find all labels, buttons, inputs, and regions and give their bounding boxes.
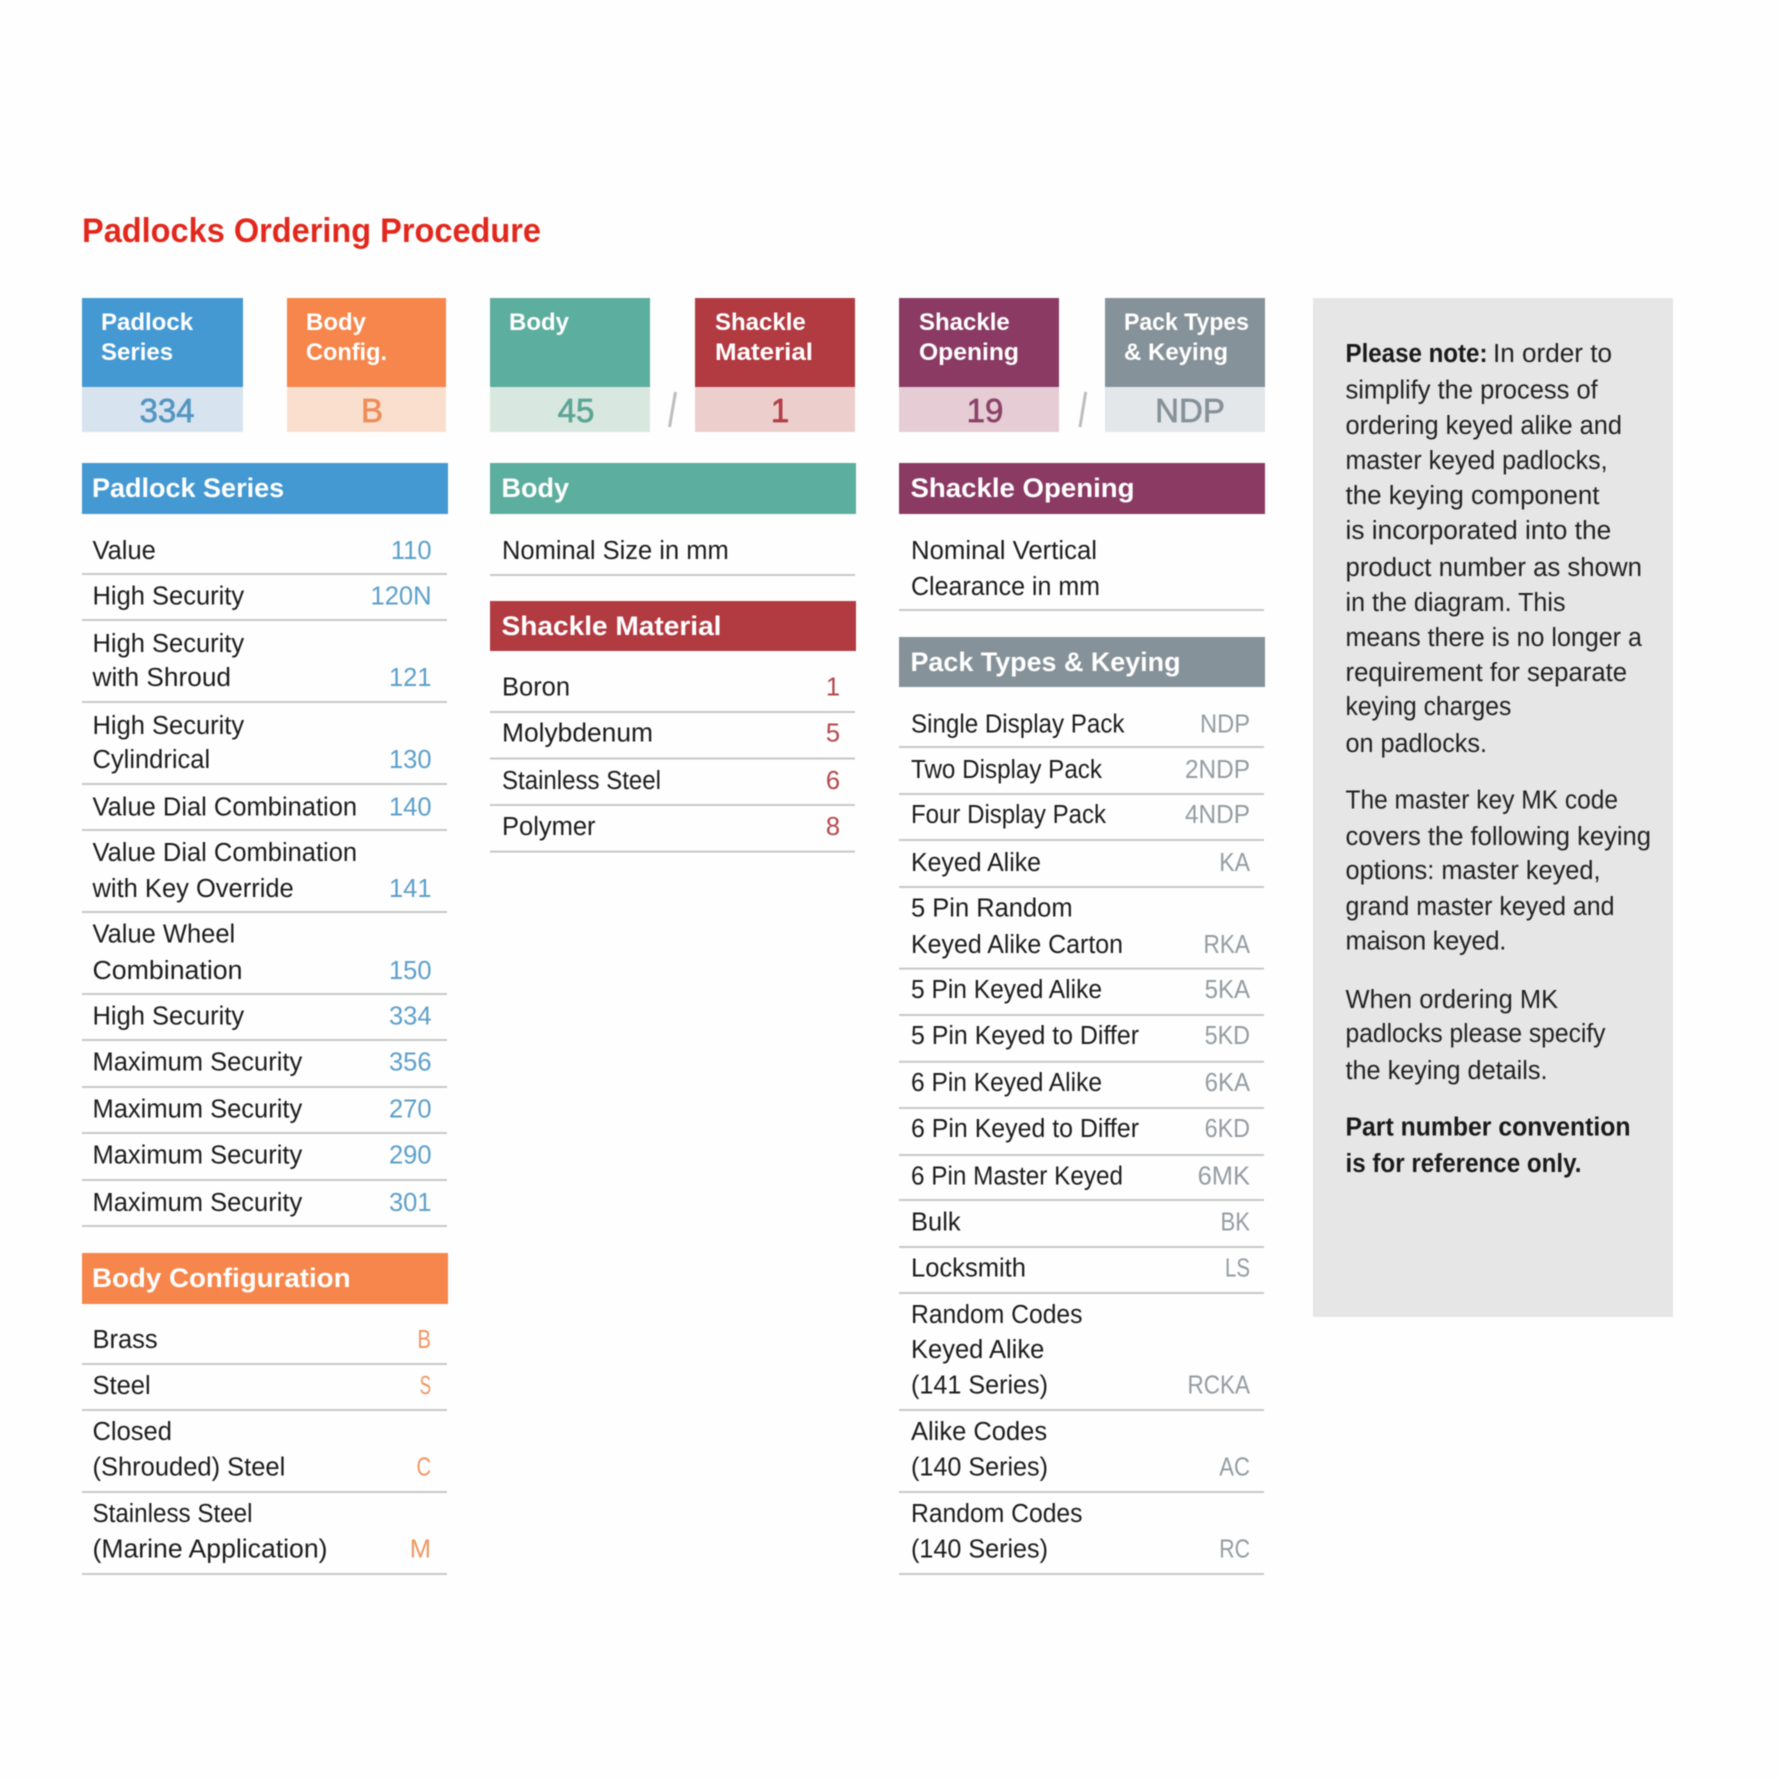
- heading: Pack Types & Keying: Pack Types & Keying: [910, 647, 1180, 677]
- text block: please note: in the diagram. This: [1346, 589, 1566, 617]
- heading: Padlock Series: [82, 463, 448, 514]
- row: Alike Codes (140 Series): Alike Codes: [911, 1418, 1047, 1446]
- part number key: Body Config: B: [361, 392, 383, 429]
- row: Value Dial Combination with Key Override: [82, 839, 447, 912]
- row: Maximum Security 270: 270: [389, 1096, 432, 1124]
- row: Random Codes Keyed Alike (141 Series): RCKA: [1188, 1372, 1250, 1400]
- row: Stainless Steel (Marine Application): M: [410, 1536, 431, 1564]
- row: Value Dial Combination: [82, 794, 447, 830]
- heading: Pack Types & Keying: [899, 637, 1265, 687]
- text block: master key: The master key MK code: [1346, 786, 1618, 814]
- heading: Shackle Material: [490, 601, 856, 651]
- text block: please note: product number as shown: [1346, 554, 1642, 582]
- row: Molybdenum: [490, 720, 855, 758]
- part number key: Body: 45: [558, 392, 594, 429]
- row: Two Display Pack: [899, 756, 1264, 794]
- row: Brass: [82, 1326, 447, 1364]
- row: Maximum Security 290: 290: [389, 1142, 432, 1170]
- row: Nominal Vertical Clearance in mm: Nominal Vertical: [911, 537, 1097, 565]
- row: Keyed Alike: [899, 849, 1264, 887]
- row: Molybdenum: 5: [826, 720, 840, 748]
- part number key: Shackle Opening: Opening: [919, 339, 1019, 366]
- row: High Security 334: High Security: [92, 1002, 244, 1030]
- row: 5 Pin Random Keyed Alike Carton: Keyed Alike Carton: [911, 931, 1123, 959]
- row: 6 Pin Master Keyed: [899, 1162, 1264, 1200]
- row: Boron: Boron: [502, 674, 570, 702]
- row: Two Display Pack: Two Display Pack: [911, 756, 1102, 784]
- row: Nominal Vertical Clearance in mm: [899, 537, 1264, 610]
- part number key: Shackle Material: Shackle: [715, 309, 806, 336]
- row: Locksmith: [899, 1254, 1264, 1293]
- heading: Padlock Series: Padlock Series: [92, 473, 284, 503]
- row: Closed (Shrouded) Steel: (Shrouded) Steel: [92, 1454, 285, 1482]
- text block: please note: In order to: [1493, 340, 1612, 368]
- text block: please note: keying charges: [1346, 693, 1511, 721]
- panel: Body: [490, 463, 856, 575]
- text block: part number convention: Part number convention: [1346, 1114, 1630, 1142]
- row: 5 Pin Keyed to Differ: [899, 1022, 1264, 1062]
- row: Alike Codes (140 Series): [899, 1418, 1264, 1492]
- row: Steel: [82, 1372, 447, 1410]
- heading: Body: Body: [502, 473, 569, 503]
- panel: Shackle Material: [490, 601, 856, 852]
- panel: Shackle Opening: [899, 463, 1265, 610]
- row: Maximum Security 356: [82, 1048, 447, 1087]
- row: 6 Pin Keyed to Differ: 6 Pin Keyed to Differ: [911, 1115, 1139, 1143]
- row: Random Codes (140 Series): [899, 1500, 1264, 1574]
- row: 5 Pin Random Keyed Alike Carton: [899, 894, 1264, 969]
- heading: Body Configuration: Body Configuration: [92, 1263, 350, 1293]
- row: 6 Pin Keyed Alike: 6 Pin Keyed Alike: [911, 1069, 1102, 1097]
- text block: please note: ordering keyed alike and: [1346, 412, 1622, 440]
- part number key: Body: [490, 298, 650, 432]
- text block: please note: master keyed padlocks,: [1346, 447, 1608, 475]
- row: Locksmith: Locksmith: [911, 1254, 1026, 1282]
- panel: Body Configuration: [82, 1253, 448, 1574]
- row: Value Wheel Combination: Value Wheel: [92, 920, 235, 948]
- row: Stainless Steel: 6: [826, 767, 840, 795]
- row: Single Display Pack: Single Display Pack: [911, 710, 1125, 738]
- slash separator: [670, 392, 676, 427]
- heading: Shackle Opening: Shackle Opening: [910, 473, 1134, 503]
- text block: ordering MK: [1346, 986, 1606, 1085]
- row: Stainless Steel (Marine Application): Stainless Steel: [92, 1500, 252, 1528]
- heading: Body: [490, 463, 856, 514]
- text block: please note: [1346, 340, 1643, 758]
- row: Random Codes Keyed Alike (141 Series): Random Codes: [911, 1301, 1082, 1329]
- row: Two Display Pack: 2NDP: [1185, 756, 1250, 784]
- row: High Security with Shroud: High Security: [92, 630, 244, 658]
- row: Nominal Size in mm: Nominal Size in mm: [502, 537, 729, 565]
- text block: ordering MK: When ordering MK: [1346, 986, 1558, 1014]
- text block: please note: the keying component: [1346, 482, 1600, 510]
- row: Random Codes Keyed Alike (141 Series): Keyed Alike: [911, 1336, 1044, 1364]
- row: Locksmith: LS: [1225, 1254, 1250, 1282]
- row: Alike Codes (140 Series): AC: [1219, 1454, 1250, 1482]
- row: Random Codes (140 Series): (140 Series): [911, 1536, 1048, 1564]
- row: High Security with Shroud: [82, 630, 447, 702]
- row: Maximum Security 270: [82, 1096, 447, 1133]
- text block: please note: simplify the process of: [1346, 377, 1599, 405]
- row: Polymer: [490, 813, 855, 852]
- row: Brass: B: [417, 1326, 431, 1354]
- panel: Padlock Series: [82, 463, 448, 1226]
- part number key: Shackle Material: [695, 298, 855, 432]
- text block: ordering MK: the keying details.: [1346, 1057, 1548, 1085]
- title: Padlocks Ordering Procedure: [82, 212, 541, 250]
- row: Boron: [490, 674, 855, 712]
- slash separator: [1080, 392, 1086, 427]
- row: Molybdenum: Molybdenum: [502, 720, 653, 748]
- row: Polymer: 8: [826, 813, 840, 841]
- row: Value Dial Combination: Value Dial Combination: [92, 794, 357, 822]
- row: 5 Pin Keyed Alike: [899, 976, 1264, 1015]
- part number key: Pack Types & Keying: NDP: [1155, 392, 1225, 429]
- row: Boron: 1: [826, 674, 840, 702]
- row: Bulk: Bulk: [911, 1208, 961, 1236]
- part number key: Pack Types & Keying: [1105, 298, 1265, 432]
- part number key: Shackle Material: Material: [715, 339, 813, 366]
- row: Four Display Pack: [899, 801, 1264, 840]
- text block: master key: covers the following keying: [1346, 823, 1651, 851]
- row: Bulk: BK: [1220, 1208, 1250, 1236]
- row: Maximum Security 290: [82, 1142, 447, 1180]
- row: Maximum Security 301: 301: [389, 1189, 432, 1217]
- row: 6 Pin Master Keyed: 6 Pin Master Keyed: [911, 1162, 1123, 1190]
- row: Value Dial Combination with Key Override: Value Dial Combination: [92, 839, 357, 867]
- row: Closed (Shrouded) Steel: C: [416, 1454, 431, 1482]
- part number key: Body Config: Config.: [306, 339, 387, 366]
- row: Brass: Brass: [92, 1326, 158, 1354]
- text block: master key: options: master keyed,: [1346, 857, 1600, 885]
- text block: please note: means there is no longer a: [1346, 624, 1643, 652]
- row: High Security 120N: [82, 582, 447, 620]
- heading: Shackle Material: Shackle Material: [502, 611, 722, 641]
- row: Stainless Steel (Marine Application): (Marine Application): [92, 1536, 328, 1564]
- row: Bulk: [899, 1208, 1264, 1247]
- row: Value Dial Combination: 140: [389, 794, 432, 822]
- part number key: Pack Types & Keying: Pack Types: [1124, 309, 1249, 336]
- row: High Security with Shroud: 121: [389, 664, 432, 692]
- text block: master key: maison keyed.: [1346, 928, 1506, 956]
- row: High Security Cylindrical: 130: [389, 746, 432, 774]
- text block: part number convention: is for reference only.: [1346, 1150, 1582, 1178]
- row: Value: Value: [92, 537, 156, 565]
- text block: please note: on padlocks.: [1346, 730, 1487, 758]
- row: Value Dial Combination with Key Override: 141: [389, 875, 432, 903]
- row: 5 Pin Keyed Alike: 5KA: [1205, 976, 1250, 1004]
- part number key: Body Config: [287, 298, 446, 432]
- row: High Security Cylindrical: [82, 712, 447, 784]
- row: Polymer: Polymer: [502, 813, 596, 841]
- part number key: Padlock Series: [82, 298, 243, 432]
- row: High Security with Shroud: with Shroud: [91, 664, 231, 692]
- row: Random Codes (140 Series): Random Codes: [911, 1500, 1082, 1528]
- row: 5 Pin Keyed to Differ: 5KD: [1205, 1022, 1250, 1050]
- text block: please note: requirement for separate: [1346, 659, 1627, 687]
- text block: master key: [1346, 786, 1651, 956]
- text block: master key: grand master keyed and: [1346, 893, 1614, 921]
- row: 6 Pin Keyed Alike: [899, 1069, 1264, 1108]
- row: Value Wheel Combination: Combination: [92, 957, 242, 985]
- row: 5 Pin Keyed Alike: 5 Pin Keyed Alike: [911, 976, 1102, 1004]
- row: Steel: Steel: [92, 1372, 151, 1400]
- row: Stainless Steel: [490, 767, 855, 805]
- row: 6 Pin Master Keyed: 6MK: [1198, 1162, 1250, 1190]
- row: Steel: S: [420, 1372, 431, 1400]
- part number key: Shackle Material: 1: [771, 392, 789, 429]
- row: Stainless Steel: Stainless Steel: [502, 767, 661, 795]
- row: Single Display Pack: [899, 710, 1264, 747]
- row: High Security 120N: High Security: [92, 582, 244, 610]
- row: Stainless Steel (Marine Application): [82, 1500, 447, 1574]
- heading: Body Configuration: [82, 1253, 448, 1304]
- row: Random Codes Keyed Alike (141 Series): (141 Series): [911, 1372, 1048, 1400]
- row: High Security Cylindrical: High Security: [92, 712, 244, 740]
- row: Maximum Security 301: Maximum Security: [92, 1189, 302, 1217]
- row: Closed (Shrouded) Steel: Closed: [92, 1418, 172, 1446]
- text block: ordering MK: padlocks please specify: [1346, 1020, 1606, 1048]
- part number key: Shackle Opening: [899, 298, 1059, 432]
- row: High Security 334: [82, 1002, 447, 1040]
- row: Value Dial Combination with Key Override: with Key Override: [92, 875, 294, 903]
- row: Maximum Security 301: [82, 1189, 447, 1226]
- part number key: Shackle Opening: 19: [967, 392, 1003, 429]
- row: High Security 334: 334: [389, 1002, 432, 1030]
- row: Alike Codes (140 Series): (140 Series): [911, 1454, 1048, 1482]
- row: Maximum Security 290: Maximum Security: [92, 1142, 302, 1170]
- row: 6 Pin Keyed to Differ: 6KD: [1205, 1115, 1250, 1143]
- part number key: Shackle Opening: Shackle: [919, 309, 1010, 336]
- part number key: Padlock Series: Padlock: [101, 309, 194, 336]
- part number key: Padlock Series: Series: [101, 339, 173, 366]
- text block: part number convention: [1346, 1114, 1630, 1178]
- row: 5 Pin Random Keyed Alike Carton: 5 Pin Random: [911, 894, 1073, 922]
- row: Value Wheel Combination: 150: [389, 957, 432, 985]
- row: 6 Pin Keyed Alike: 6KA: [1205, 1069, 1250, 1097]
- row: Closed (Shrouded) Steel: [82, 1418, 447, 1492]
- heading: Shackle Opening: [899, 463, 1265, 514]
- row: High Security Cylindrical: Cylindrical: [92, 746, 210, 774]
- row: Maximum Security 356: 356: [389, 1048, 432, 1076]
- row: 5 Pin Random Keyed Alike Carton: RKA: [1204, 931, 1250, 959]
- row: Four Display Pack: 4NDP: [1185, 801, 1250, 829]
- row: Random Codes (140 Series): RC: [1219, 1536, 1250, 1564]
- text block: please note: Please note:: [1346, 340, 1488, 368]
- row: Value: 110: [391, 537, 432, 565]
- text block: please note: is incorporated into the: [1346, 517, 1611, 545]
- row: Keyed Alike: Keyed Alike: [911, 849, 1041, 877]
- row: Value Wheel Combination: [82, 920, 447, 994]
- row: High Security 120N: 120N: [371, 582, 432, 610]
- row: Single Display Pack: NDP: [1200, 710, 1250, 738]
- part number key: Body: Body: [509, 309, 570, 336]
- row: Maximum Security 356: Maximum Security: [92, 1048, 302, 1076]
- panel: note: [1313, 298, 1673, 1317]
- panel: Pack Types & Keying: [899, 637, 1265, 1574]
- row: Maximum Security 270: Maximum Security: [92, 1096, 302, 1124]
- row: 6 Pin Keyed to Differ: [899, 1115, 1264, 1155]
- row: Four Display Pack: Four Display Pack: [911, 801, 1106, 829]
- row: Value: [82, 537, 447, 574]
- part number key: Pack Types & Keying: & Keying: [1124, 339, 1228, 366]
- part number key: Body Config: Body: [306, 309, 367, 336]
- row: Random Codes Keyed Alike (141 Series): [899, 1301, 1264, 1410]
- row: Nominal Vertical Clearance in mm: Clearance in mm: [911, 573, 1100, 601]
- row: Keyed Alike: KA: [1219, 849, 1250, 877]
- row: 5 Pin Keyed to Differ: 5 Pin Keyed to Differ: [911, 1022, 1139, 1050]
- part number key: Padlock Series: 334: [139, 392, 195, 429]
